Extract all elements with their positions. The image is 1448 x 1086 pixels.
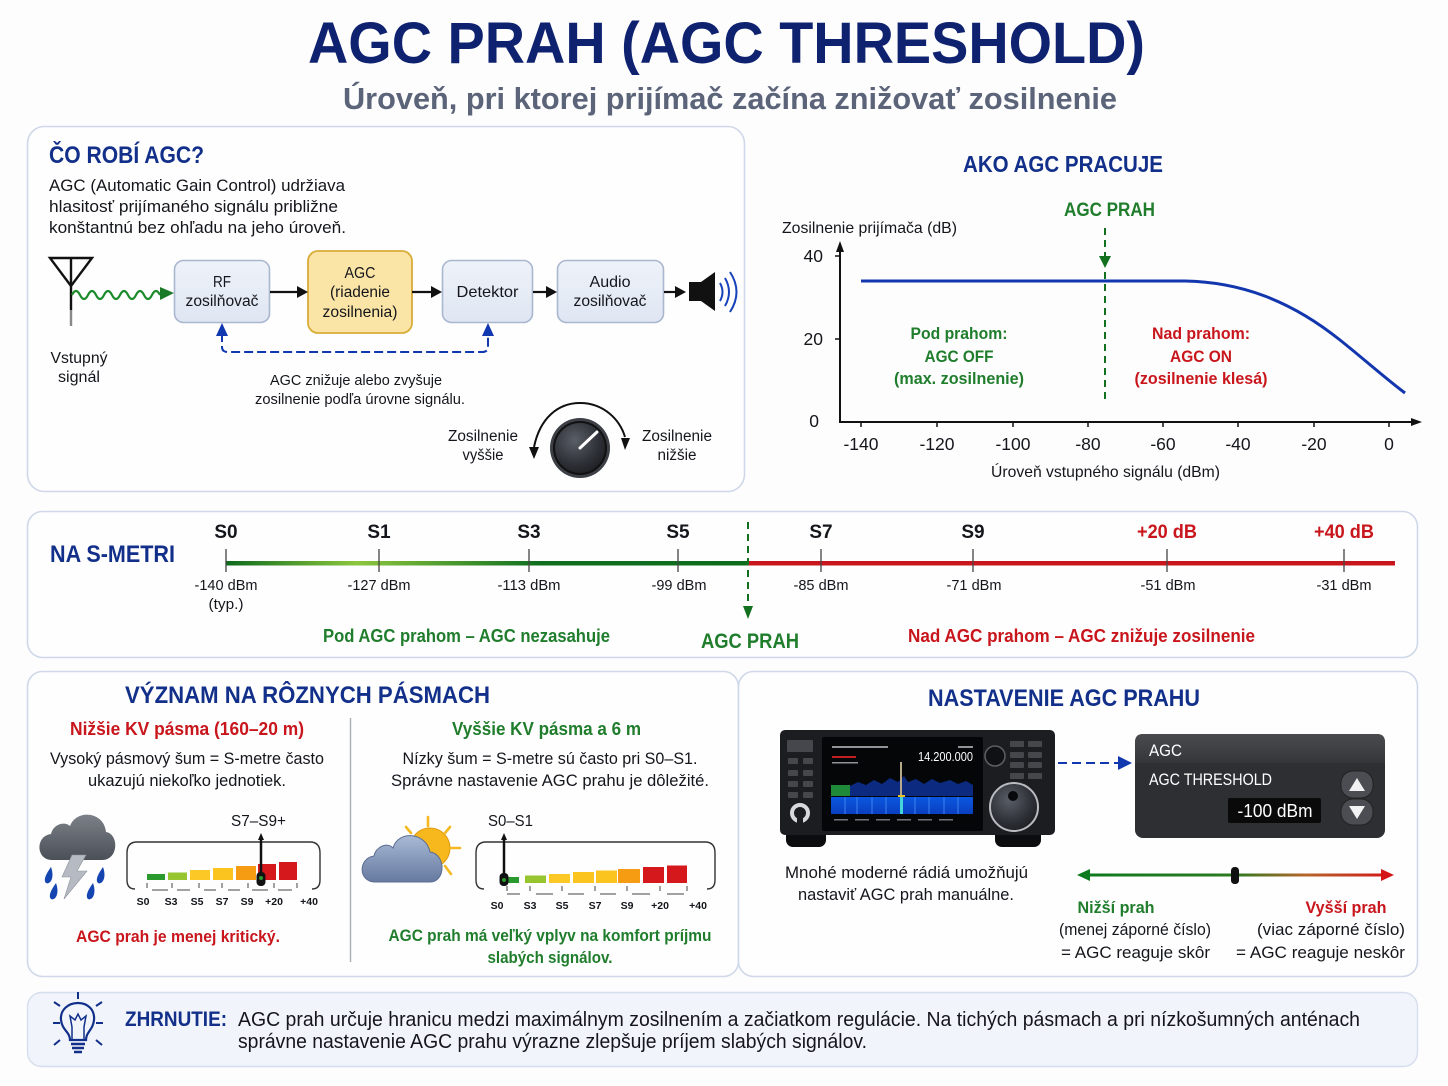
- scale labels: S0: [214, 522, 238, 543]
- higher threshold text: Vyšší prah: [1306, 899, 1386, 917]
- icon: transceiver: [780, 730, 1055, 847]
- mini meter: quiet: S9: [621, 900, 634, 912]
- dBm labels: -71 dBm: [946, 578, 1002, 594]
- icon: gain knob: [529, 403, 630, 478]
- y axis labels: [804, 246, 823, 431]
- block: AGC: AGC: [344, 265, 376, 282]
- dBm labels: [194, 578, 1372, 613]
- dBm labels: -140 dBm: [194, 578, 258, 594]
- label: gain higher: [448, 428, 518, 464]
- mini meter: quiet: S5: [556, 900, 569, 912]
- heading: what AGC does: ČO ROBÍ AGC?: [49, 141, 204, 169]
- label: input signal: [50, 350, 108, 386]
- gain curve: [861, 281, 1405, 393]
- block: AGC: (riadenie: [330, 284, 390, 301]
- axes: [835, 241, 1422, 427]
- mini meter: quiet: +40: [689, 900, 707, 912]
- signal path arrows: [270, 286, 686, 298]
- panel: summary: [28, 992, 1418, 1066]
- label: gain lower: [642, 428, 712, 464]
- heading: S-meter: NA S-METRI: [50, 541, 175, 568]
- x axis labels: 0: [1384, 434, 1394, 454]
- mini meter: noisy: [127, 833, 320, 908]
- AGC menu panel: AGC: [1149, 742, 1182, 760]
- mini meter: quiet: S0: [491, 900, 504, 912]
- down button: [1341, 799, 1373, 825]
- AGC menu panel: -100 dBm: [1238, 801, 1312, 821]
- note: higher HF: [388, 927, 712, 967]
- AGC menu panel: AGC THRESHOLD: [1149, 771, 1272, 789]
- dBm labels: -113 dBm: [498, 578, 560, 594]
- icon: antenna: [50, 258, 92, 326]
- feedback caption: AGC znižuje alebo zvyšuje: [270, 373, 442, 389]
- title: AGC PRAH (AGC THRESHOLD): [308, 11, 1145, 76]
- column text: higher HF: Správne nastavenie AGC prahu je dôležité.: [391, 772, 709, 790]
- heading: setting: NASTAVENIE AGC PRAHU: [928, 685, 1200, 712]
- lower threshold text: = AGC reaguje skôr: [1061, 944, 1211, 962]
- note: above threshold: Nad prahom:: [1152, 324, 1250, 343]
- higher threshold text: (viac záporné číslo): [1257, 921, 1405, 939]
- dBm labels: (typ.): [208, 597, 244, 613]
- block: AGC: zosilnenia): [322, 304, 398, 321]
- scale labels: S5: [666, 522, 690, 543]
- block: RF amplifier: zosilňovač: [186, 293, 259, 310]
- mini meter: noisy: S3: [165, 896, 178, 908]
- block: AGC: [308, 251, 412, 333]
- below threshold caption: Pod AGC prahom – AGC nezasahuje: [323, 626, 610, 646]
- dBm labels: -51 dBm: [1140, 578, 1196, 594]
- summary text: AGC prah určuje hranicu medzi maximálnym zosilnením a začiatkom regulácie. Na tichých pásmach a pri nízkošumných anténach: [238, 1009, 1360, 1031]
- mini meter: noisy: S0: [137, 896, 150, 908]
- icon: sun and cloud: [362, 817, 460, 882]
- note: below threshold: AGC OFF: [924, 347, 994, 366]
- threshold slider arrow: [1077, 867, 1394, 884]
- column text: lower HF: Vysoký pásmový šum = S-metre často: [50, 750, 324, 768]
- AGC menu panel: [1135, 734, 1385, 838]
- panel: AGC threshold setting: [738, 672, 1418, 976]
- up button: [1341, 771, 1373, 798]
- x axis labels: [843, 434, 1394, 454]
- x axis labels: -140: [843, 434, 879, 454]
- description text: [49, 176, 346, 237]
- chart: how AGC works: [782, 151, 1422, 481]
- x axis labels: -80: [1075, 434, 1101, 454]
- threshold label: AGC PRAH: [1064, 200, 1155, 221]
- icon: speaker: [689, 272, 736, 312]
- threshold marker label: AGC PRAH: [701, 630, 799, 653]
- block: audio amplifier: Audio: [590, 274, 630, 291]
- scale labels: S7: [809, 522, 833, 543]
- mini meter: quiet: +20: [651, 900, 669, 912]
- scale labels: S3: [517, 522, 541, 543]
- x axis labels: -60: [1150, 434, 1176, 454]
- dBm labels: -99 dBm: [652, 578, 706, 594]
- note: below threshold: (max. zosilnenie): [894, 369, 1024, 388]
- note: below threshold: Pod prahom:: [910, 324, 1008, 343]
- y axis labels: 20: [804, 329, 823, 349]
- lower threshold text: Nižší prah: [1078, 899, 1154, 917]
- panel: meaning on bands: [28, 672, 738, 976]
- label: input signal: Vstupný: [50, 350, 108, 367]
- label: gain lower: Zosilnenie: [642, 428, 712, 445]
- frequency: 14.200.000: [918, 750, 973, 764]
- chart heading: AKO AGC PRACUJE: [963, 151, 1163, 177]
- mini meter: noisy: S9: [241, 896, 254, 908]
- block: RF amplifier: [174, 260, 270, 322]
- x axis labels: -40: [1225, 434, 1251, 454]
- note: below threshold: [894, 324, 1024, 388]
- y axis title: Zosilnenie prijímača (dB): [782, 220, 957, 237]
- dashed feedback arrow: [216, 323, 494, 352]
- label: gain lower: nižšie: [658, 447, 696, 464]
- dashed arrow to menu: [1058, 756, 1132, 770]
- panel: S-meter: [28, 512, 1418, 658]
- dBm labels: -127 dBm: [348, 578, 410, 594]
- radio caption: [785, 863, 1028, 904]
- scale bar: [226, 549, 1395, 572]
- x axis labels: -120: [919, 434, 955, 454]
- higher threshold text: [1236, 899, 1406, 962]
- note: higher HF: slabých signálov.: [488, 949, 612, 967]
- buttons: [787, 740, 1042, 798]
- dBm labels: -85 dBm: [794, 578, 848, 594]
- radio caption: nastaviť AGC prah manuálne.: [798, 885, 1014, 904]
- mini meter: noisy: +40: [300, 896, 318, 908]
- mini meter: noisy: +20: [265, 896, 283, 908]
- column text: higher HF: Nízky šum = S-metre sú často pri S0–S1.: [402, 750, 698, 768]
- threshold marker: [743, 522, 753, 619]
- column text: lower HF: [50, 750, 324, 790]
- mini meter: noisy: S7: [216, 896, 229, 908]
- subtitle: Úroveň, pri ktorej prijímač začína znižovať zosilnenie: [343, 80, 1117, 116]
- mini meter: quiet: S7: [589, 900, 602, 912]
- lower threshold text: (menej záporné číslo): [1059, 921, 1211, 939]
- block: audio amplifier: [558, 260, 664, 322]
- scale labels: S9: [961, 522, 985, 543]
- scale labels: +20 dB: [1137, 522, 1197, 543]
- description text: konštantnú bez ohľadu na jeho úroveň.: [49, 218, 346, 237]
- x axis labels: -20: [1301, 434, 1327, 454]
- scale labels: [214, 522, 1374, 543]
- feedback caption: zosilnenie podľa úrovne signálu.: [255, 392, 465, 408]
- scale labels: +40 dB: [1314, 522, 1374, 543]
- spectrum: [831, 785, 850, 796]
- higher threshold text: = AGC reaguje neskôr: [1236, 944, 1406, 962]
- note: above threshold: (zosilnenie klesá): [1134, 369, 1268, 388]
- description text: hlasitosť prijímaného signálu približne: [49, 197, 338, 216]
- heading: bands: VÝZNAM NA RÔZNYCH PÁSMACH: [125, 681, 490, 709]
- label: S0-S1: S0–S1: [488, 813, 533, 830]
- y axis labels: 40: [804, 246, 823, 266]
- lower threshold text: [1059, 899, 1211, 962]
- icon: light bulb: [53, 992, 103, 1052]
- label: input signal: signál: [58, 369, 100, 386]
- mini meter: quiet: [476, 833, 715, 912]
- input signal wave: [72, 287, 174, 300]
- label: gain higher: vyššie: [462, 447, 504, 464]
- divider: [350, 718, 352, 962]
- threshold line: [1099, 228, 1111, 404]
- label: S7-S9+: S7–S9+: [231, 813, 286, 830]
- x axis title: Úroveň vstupného signálu (dBm): [991, 462, 1220, 481]
- note: above threshold: [1134, 324, 1268, 388]
- summary text: [238, 1009, 1360, 1053]
- radio caption: Mnohé moderné rádiá umožňujú: [785, 863, 1028, 882]
- mini meter: noisy: S5: [191, 896, 204, 908]
- note: higher HF: AGC prah má veľký vplyv na komfort príjmu: [388, 927, 712, 945]
- note: above threshold: AGC ON: [1170, 347, 1232, 366]
- y axis labels: 0: [809, 411, 819, 431]
- column text: higher HF: [391, 750, 709, 790]
- block: detector: [442, 260, 532, 322]
- label: gain higher: Zosilnenie: [448, 428, 518, 445]
- column heading: lower HF: Nižšie KV pásma (160–20 m): [70, 719, 304, 739]
- above threshold caption: Nad AGC prahom – AGC znižuje zosilnenie: [908, 626, 1255, 646]
- icon: storm cloud: [39, 815, 115, 899]
- block: RF amplifier: RF: [213, 274, 231, 291]
- column heading: higher HF: Vyššie KV pásma a 6 m: [452, 719, 641, 739]
- block: audio amplifier: zosilňovač: [574, 293, 647, 310]
- panel: what AGC does: [28, 126, 744, 492]
- note: lower HF: AGC prah je menej kritický.: [76, 928, 280, 946]
- mini meter: quiet: S3: [524, 900, 537, 912]
- threshold value: [1228, 798, 1321, 823]
- dBm labels: -31 dBm: [1316, 578, 1372, 594]
- description text: AGC (Automatic Gain Control) udržiava: [49, 176, 346, 195]
- summary label: ZHRNUTIE:: [125, 1008, 227, 1031]
- scale labels: S1: [367, 522, 391, 543]
- block: detector: Detektor: [456, 284, 519, 301]
- column text: lower HF: ukazujú niekoľko jednotiek.: [88, 772, 286, 790]
- summary text: správne nastavenie AGC prahu výrazne zlepšuje príjem slabých signálov.: [238, 1031, 867, 1053]
- x axis labels: -100: [995, 434, 1031, 454]
- feedback caption: [255, 373, 465, 408]
